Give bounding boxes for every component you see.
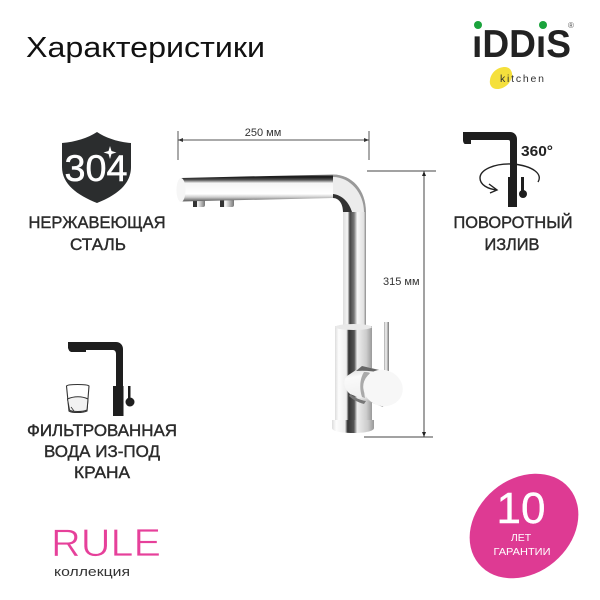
badge blob xyxy=(449,452,599,600)
filter icon faucet silhouette xyxy=(68,342,124,416)
icon: glass of water xyxy=(66,384,89,412)
filter icon knob xyxy=(126,398,134,406)
faucet photo xyxy=(176,174,408,433)
rotating icon arrow xyxy=(480,164,539,193)
collection name RULE: RULE xyxy=(51,522,161,565)
faucet body top ring xyxy=(335,324,372,330)
warranty badge: ГАРАНТИИ xyxy=(494,546,550,558)
height dimension lines xyxy=(364,171,436,437)
height dimension value: 315 мм xyxy=(383,276,420,288)
warranty badge xyxy=(449,452,599,600)
icon: 304 stainless steel shield xyxy=(62,132,131,203)
rotating icon lever xyxy=(521,177,524,193)
height dimension: 315 mm xyxy=(364,171,436,437)
label: rotating spout: ПОВОРОТНЫЙ xyxy=(454,213,572,232)
glass outline xyxy=(66,384,89,412)
icon: filtered water faucet and glass xyxy=(66,342,134,416)
title: Характеристики xyxy=(26,32,265,64)
faucet spout horizontal xyxy=(181,174,333,202)
collection caption: коллекция xyxy=(54,564,130,579)
label: stainless steel xyxy=(28,214,166,254)
faucet body xyxy=(335,326,372,420)
logo yellow spot xyxy=(490,67,512,89)
logo: IDDIS kitchen xyxy=(472,21,574,89)
shield number: 304 xyxy=(64,148,128,189)
label: filtered water: КРАНА xyxy=(74,464,130,482)
shield sparkle xyxy=(104,146,116,159)
faucet base ring xyxy=(332,420,374,433)
glass water xyxy=(68,397,88,412)
rotating icon 360 label: 360° xyxy=(521,143,553,160)
label: filtered water: ВОДА ИЗ-ПОД xyxy=(44,443,160,461)
label: filtered water xyxy=(27,422,177,482)
rotating icon faucet silhouette xyxy=(463,132,517,207)
width dimension value: 250 мм xyxy=(245,127,281,139)
width dimension: 250 mm xyxy=(178,127,369,160)
badge caption: ЛЕТ xyxy=(511,532,532,544)
faucet spout elbow xyxy=(333,174,366,212)
width dimension arrowheads xyxy=(178,138,369,142)
glass highlight xyxy=(71,407,74,411)
label: rotating spout xyxy=(454,213,572,254)
rotating icon knob xyxy=(519,190,527,198)
logo kitchen text: kitchen xyxy=(500,73,544,85)
badge number: 10 xyxy=(497,484,545,533)
logo wordmark: ıDDıS xyxy=(472,23,571,66)
label: filtered water: ФИЛЬТРОВАННАЯ xyxy=(27,422,177,440)
faucet lever xyxy=(384,322,389,372)
width dimension lines xyxy=(178,131,369,160)
label: rotating spout: ИЗЛИВ xyxy=(484,236,540,254)
faucet aerator buttons xyxy=(193,198,234,207)
shield shape xyxy=(62,132,131,203)
height dimension arrowheads xyxy=(422,171,426,437)
faucet handle xyxy=(344,364,408,412)
label: stainless steel: НЕРЖАВЕЮЩАЯ xyxy=(28,214,166,232)
logo green dots xyxy=(474,21,547,29)
filter icon lever xyxy=(128,386,130,399)
faucet vertical riser xyxy=(343,212,366,328)
collection name xyxy=(51,522,161,579)
label: stainless steel: СТАЛЬ xyxy=(70,236,126,254)
logo registered mark: ® xyxy=(568,21,574,30)
faucet spout end cap xyxy=(176,178,186,202)
icon: rotating spout 360 xyxy=(463,132,553,207)
